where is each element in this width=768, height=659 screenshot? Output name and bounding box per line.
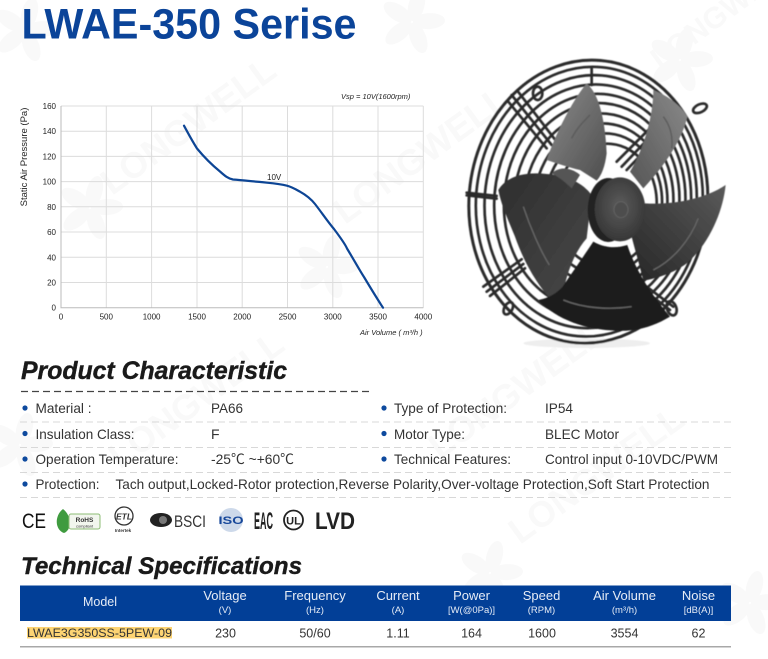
table header: (m³/h)	[612, 605, 637, 616]
table header: (V)	[219, 605, 231, 616]
x axis title: Air Volume ( m³/h )	[359, 328, 423, 337]
background watermark: LONGWELL	[421, 312, 611, 466]
x axis labels: 2000	[233, 312, 252, 322]
fan shadow	[523, 339, 650, 348]
heading: technical specifications: Technical Specifications	[21, 553, 302, 580]
table header: [dB(A)]	[684, 605, 713, 616]
chart: static air pressure vs air volume	[19, 92, 433, 337]
y axis labels	[43, 102, 57, 312]
logo: ETL	[115, 507, 133, 533]
table header: Voltage	[203, 588, 247, 603]
table header: Air Volume	[593, 588, 656, 603]
logo: ISO: ISO	[218, 515, 244, 527]
wire guard rings	[457, 50, 720, 353]
row: operation temperature: Technical Features:	[394, 451, 511, 467]
logo: ISO	[218, 508, 244, 532]
motor hub	[588, 178, 629, 242]
table data row: 62	[692, 626, 705, 640]
x axis labels: 1500	[188, 312, 206, 322]
row: insulation class	[22, 426, 619, 442]
logo: ETL: ETL	[116, 512, 132, 522]
row: insulation class: Insulation Class:	[36, 426, 134, 442]
y axis labels: 100	[43, 178, 57, 186]
table header: (Hz)	[306, 605, 324, 616]
y axis labels: 40	[47, 254, 57, 262]
blade: root highlight	[552, 169, 580, 188]
row: operation temperature: Operation Temperature:	[36, 451, 178, 467]
logo: RoHS: RoHS	[76, 517, 94, 524]
blade ribs	[523, 115, 698, 308]
y axis labels: 0	[52, 304, 57, 312]
curve label: 10V	[267, 173, 282, 182]
characteristics list	[20, 400, 731, 498]
certification logos: EAC	[254, 508, 273, 535]
blade: right	[632, 185, 726, 281]
table header: Speed	[523, 588, 560, 603]
table data row: 50/60	[299, 626, 331, 640]
x axis labels: 2500	[279, 312, 297, 322]
table header: Current	[376, 588, 420, 603]
blade: bottom	[538, 242, 670, 331]
table data row	[27, 626, 705, 640]
logo: RoHS	[57, 509, 100, 533]
table header: Frequency	[284, 588, 346, 603]
performance curve	[184, 126, 383, 308]
x axis labels: 3500	[369, 312, 387, 322]
table data row: 164	[461, 626, 482, 640]
x axis labels: 0	[59, 312, 64, 322]
row: material	[22, 400, 573, 416]
table data row: 1.11	[386, 626, 410, 640]
y axis labels: 20	[47, 278, 57, 288]
logo: RoHS: compliant	[76, 524, 94, 528]
row: operation temperature	[22, 451, 718, 467]
table bottom rule	[20, 646, 731, 648]
logo: UL	[284, 510, 303, 530]
blade: top	[547, 83, 607, 181]
background watermark: LONGWELL	[501, 397, 691, 551]
row: operation temperature: Control input 0-10VDC/PWM	[545, 451, 718, 467]
y axis labels: 140	[43, 127, 57, 136]
y axis labels: 80	[47, 203, 57, 212]
table data row: 3554	[611, 626, 638, 640]
y axis title: Static Air Pressure (Pa)	[19, 108, 30, 206]
product photo: axial fan with wire guard	[457, 50, 726, 353]
row dividers	[20, 422, 731, 498]
logo: BSCI: BSCI	[174, 512, 206, 531]
certification logos	[22, 507, 355, 535]
background watermark: LONGWELL	[101, 322, 291, 476]
x axis labels: 3000	[324, 312, 342, 322]
heading dashed rule	[21, 390, 373, 392]
logo: UL: UL	[286, 516, 301, 528]
row: protection: Protection:	[36, 476, 100, 492]
background watermark: LONGWELL	[93, 48, 283, 202]
row: operation temperature: -25℃ ~+60℃	[211, 451, 294, 467]
table header: Model	[83, 595, 117, 609]
y axis labels: 160	[43, 102, 57, 111]
row: material: IP54	[545, 400, 573, 416]
background watermark: LONGWELL	[326, 77, 516, 231]
table header: (A)	[392, 605, 404, 616]
table header: (RPM)	[528, 605, 555, 616]
table header: Noise	[682, 588, 715, 603]
logo: CE: CE	[22, 510, 46, 533]
table data row: 1600	[528, 626, 556, 640]
logo: BSCI	[150, 512, 206, 531]
blade: upper right	[630, 90, 687, 188]
row: insulation class: F	[211, 426, 220, 442]
row: material: Type of Protection:	[394, 400, 507, 416]
row: material: Material :	[36, 400, 92, 416]
row: insulation class: Motor Type:	[394, 426, 465, 442]
x axis labels: 1000	[143, 312, 161, 322]
x axis labels	[59, 312, 433, 322]
chart grid	[61, 106, 423, 308]
table data row: 230	[215, 626, 236, 640]
row: protection: Tach output,Locked-Rotor protection,Reverse Polarity,Over-voltage Protection,Soft Start Protection	[116, 476, 710, 492]
y axis labels: 120	[43, 152, 57, 162]
table header: Power	[453, 588, 491, 603]
speed note: Vsp = 10V(1600rpm)	[341, 92, 411, 101]
logo: LVD: LVD	[315, 508, 355, 535]
x axis labels: 500	[100, 312, 114, 322]
table header: [W(@0Pa)]	[448, 605, 495, 616]
y axis labels: 60	[47, 228, 57, 237]
title: LWAE-350 Serise	[22, 0, 356, 48]
row: material: PA66	[211, 400, 243, 416]
heading: product characteristic: Product Characteristic	[21, 357, 287, 385]
table header	[20, 586, 731, 621]
table data row: LWAE3G350SS-5PEW-09	[27, 626, 172, 640]
specifications table	[20, 586, 731, 648]
logo: ETL: Intertek	[115, 528, 132, 533]
row: insulation class: BLEC Motor	[545, 426, 619, 442]
x axis labels: 4000	[414, 312, 433, 322]
wire guard struts and lugs	[467, 68, 708, 317]
blade: left	[498, 173, 592, 309]
